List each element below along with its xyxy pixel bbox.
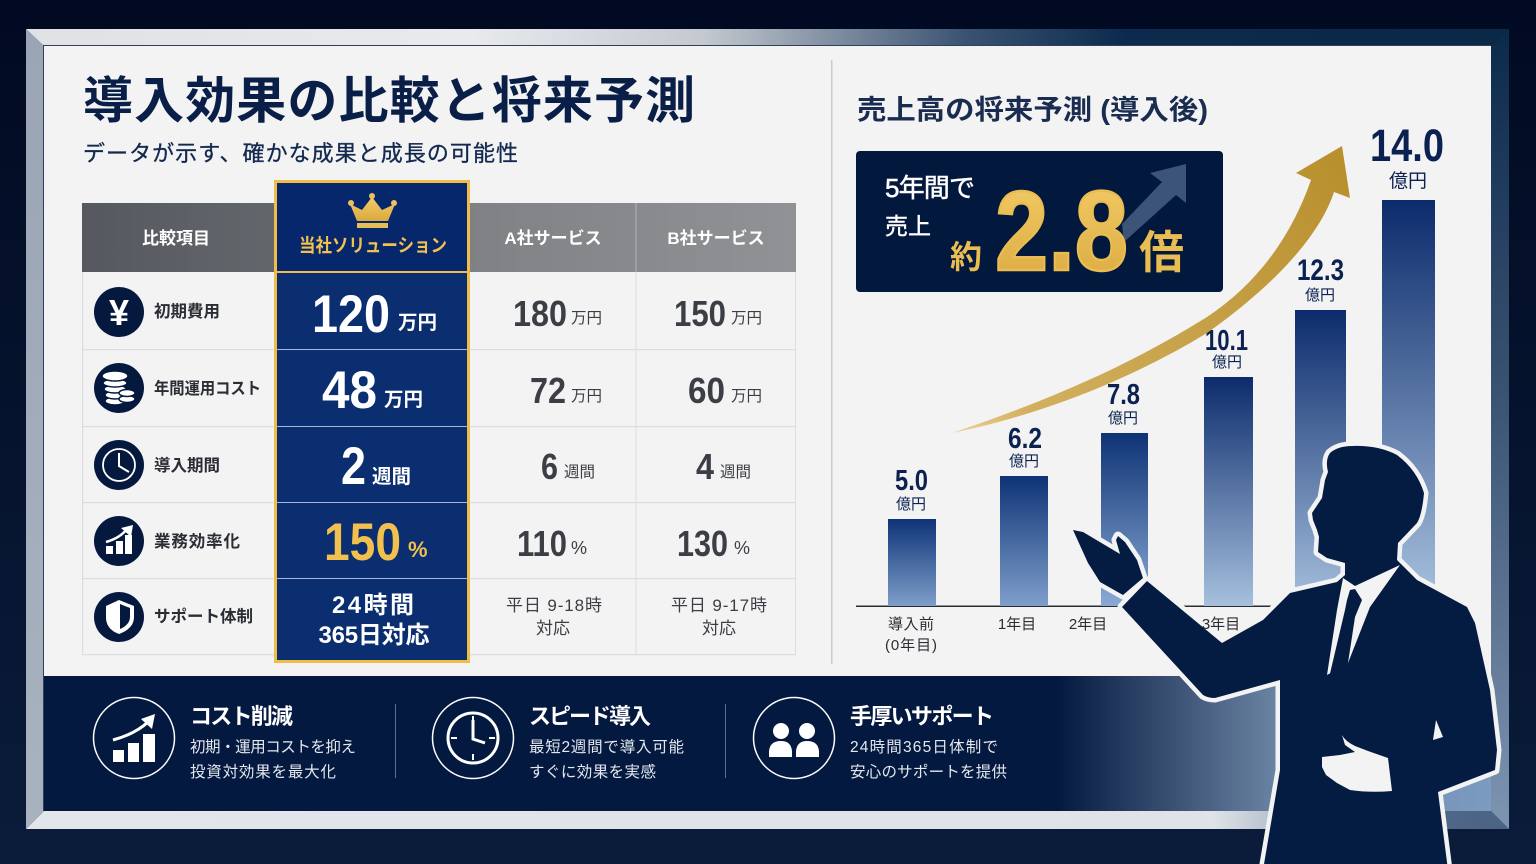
callout: 5年間で売上約2.8倍: 2.8 [995, 168, 1128, 294]
benefit: 手厚いサポート: 手厚いサポート [850, 704, 994, 729]
band dividers [395, 704, 726, 778]
bar 5年目 [1370, 120, 1444, 600]
row: サポート体制: 平日 9-17時 [671, 596, 767, 615]
callout: 5年間で売上約2.8倍: 倍 [1139, 227, 1184, 278]
table header: B社サービス [667, 228, 765, 248]
bar 1年目: 6.2 [1008, 423, 1042, 455]
row: 年間運用コスト [94, 361, 762, 420]
chart heading: 売上高の将来予測 (導入後) [857, 94, 1208, 125]
row: サポート体制: 対応 [702, 619, 736, 638]
row: 業務効率化: 150 [324, 513, 401, 572]
benefit: コスト削減 [94, 698, 356, 781]
bar 4年目 [1295, 254, 1346, 606]
row: 初期費用: 初期費用 [154, 302, 220, 321]
presenter hand [1073, 530, 1143, 595]
row: サポート体制: 対応 [536, 619, 570, 638]
row: 年間運用コスト: 72 [530, 370, 566, 411]
row: 導入期間: 週間 [564, 463, 595, 481]
panel: bottom band [44, 676, 1491, 811]
tie [1328, 589, 1362, 682]
row: 導入期間: 週間 [372, 466, 411, 488]
bar 1年目: 億円 [1009, 453, 1039, 470]
row: 業務効率化: 130 [677, 523, 728, 564]
icon: crown [348, 193, 397, 228]
bar 導入前 [885, 465, 937, 654]
benefit: コスト削減: 初期・運用コストを抑え [190, 738, 356, 756]
row: 業務効率化: 業務効率化 [154, 532, 240, 551]
row: 初期費用: 180 [513, 293, 567, 334]
row: 年間運用コスト: 万円 [384, 389, 423, 411]
bar 2年目: 億円 [1108, 410, 1138, 427]
bar 1年目: 1年目 [998, 616, 1036, 633]
row: 年間運用コスト: 万円 [571, 388, 602, 405]
subtitle: データが示す、確かな成果と成長の可能性 [83, 141, 518, 166]
bar 5年目: 億円 [1389, 170, 1427, 192]
row: 年間運用コスト: 万円 [731, 388, 762, 405]
benefit: 手厚いサポート: 安心のサポートを提供 [850, 763, 1007, 781]
row: 導入期間: 導入期間 [154, 456, 220, 475]
bar 2年目 [1069, 379, 1148, 633]
row: サポート体制: サポート体制 [154, 606, 253, 626]
divider [831, 60, 832, 664]
shirt [1327, 565, 1400, 675]
bar 3年目: 億円 [1212, 354, 1242, 371]
axis label: 3年目: 3年目 [1202, 616, 1240, 633]
figure: presenter silhouette [1073, 446, 1497, 864]
benefit: 手厚いサポート [754, 698, 1007, 781]
bar 4年目: 12.3 [1297, 254, 1344, 287]
row: 初期費用: 万円 [398, 312, 437, 334]
bar 導入前: 導入前 [888, 616, 934, 633]
row: 初期費用: 120 [312, 285, 390, 344]
row: サポート体制: 24時間 [332, 592, 414, 619]
callout: 5年間で売上約2.8倍: 約 [950, 239, 982, 275]
bar 導入前: (0年目) [885, 637, 937, 654]
bar 導入前: 億円 [896, 496, 926, 513]
row: 初期費用: 150 [674, 293, 726, 334]
row: サポート体制: 365日対応 [318, 622, 430, 649]
row: 導入期間: 2 [341, 437, 366, 496]
row: サポート体制: 平日 9-18時 [506, 596, 602, 615]
title: 導入効果の比較と将来予測 [83, 73, 696, 129]
bar chart [856, 120, 1444, 654]
row: 導入期間: 6 [541, 446, 558, 487]
row: 業務効率化: % [408, 537, 428, 562]
row: 年間運用コスト: 年間運用コスト [154, 378, 261, 398]
bar 3年目 [1204, 325, 1253, 606]
bar 1年目 [998, 423, 1048, 633]
row: 導入期間: 4 [696, 446, 714, 487]
bar 導入前: 5.0 [895, 465, 928, 497]
arrow: growth [952, 146, 1350, 433]
benefit: コスト削減: コスト削減 [190, 704, 293, 729]
row: 導入期間 [94, 437, 751, 496]
bar 5年目: 14.0 [1370, 120, 1444, 171]
presenter body [1122, 446, 1497, 864]
row: 業務効率化: % [734, 538, 750, 558]
panel: comparison table [82, 182, 796, 662]
benefit: 手厚いサポート: 24時間365日体制で [850, 738, 998, 756]
axis [856, 606, 1276, 607]
row: 初期費用: 万円 [571, 310, 602, 327]
table header: A社サービス [504, 228, 602, 248]
highlight column [276, 182, 468, 662]
benefit: コスト削減: 投資対効果を最大化 [190, 763, 336, 781]
bar 2年目: 2年目 [1069, 616, 1107, 633]
bar 2年目: 7.8 [1107, 379, 1140, 411]
lower hand [1322, 735, 1392, 792]
benefit: スピード導入: すぐに効果を実感 [529, 763, 656, 781]
callout: 5年間で売上約2.8倍: 売上 [885, 213, 931, 239]
arm gap [1433, 720, 1443, 740]
row: サポート体制 [94, 592, 767, 649]
row: 初期費用 [94, 285, 762, 344]
benefit: スピード導入 [432, 698, 684, 781]
table header: 比較項目 [142, 229, 210, 248]
row: 年間運用コスト: 60 [688, 370, 725, 411]
row: 業務効率化: % [571, 538, 587, 558]
benefit: スピード導入: 最短2週間で導入可能 [529, 738, 684, 756]
bar 4年目: 億円 [1305, 287, 1335, 304]
callout: 5年間で売上約2.8倍: 5年間で [885, 173, 975, 203]
row: 年間運用コスト: 48 [322, 361, 377, 420]
column title: 当社ソリューション [299, 235, 447, 256]
row: 業務効率化 [94, 513, 750, 572]
table body grid [82, 272, 796, 655]
callout: 5年間で売上約2.8倍 [856, 151, 1223, 294]
table header [82, 203, 796, 272]
row: 業務効率化: 110 [517, 523, 567, 564]
bar 3年目: 10.1 [1205, 325, 1248, 357]
row: 導入期間: 週間 [720, 463, 751, 481]
benefit: スピード導入: スピード導入 [529, 704, 651, 729]
row: 初期費用: ¥ [109, 292, 129, 333]
row: 初期費用: 万円 [731, 310, 762, 327]
